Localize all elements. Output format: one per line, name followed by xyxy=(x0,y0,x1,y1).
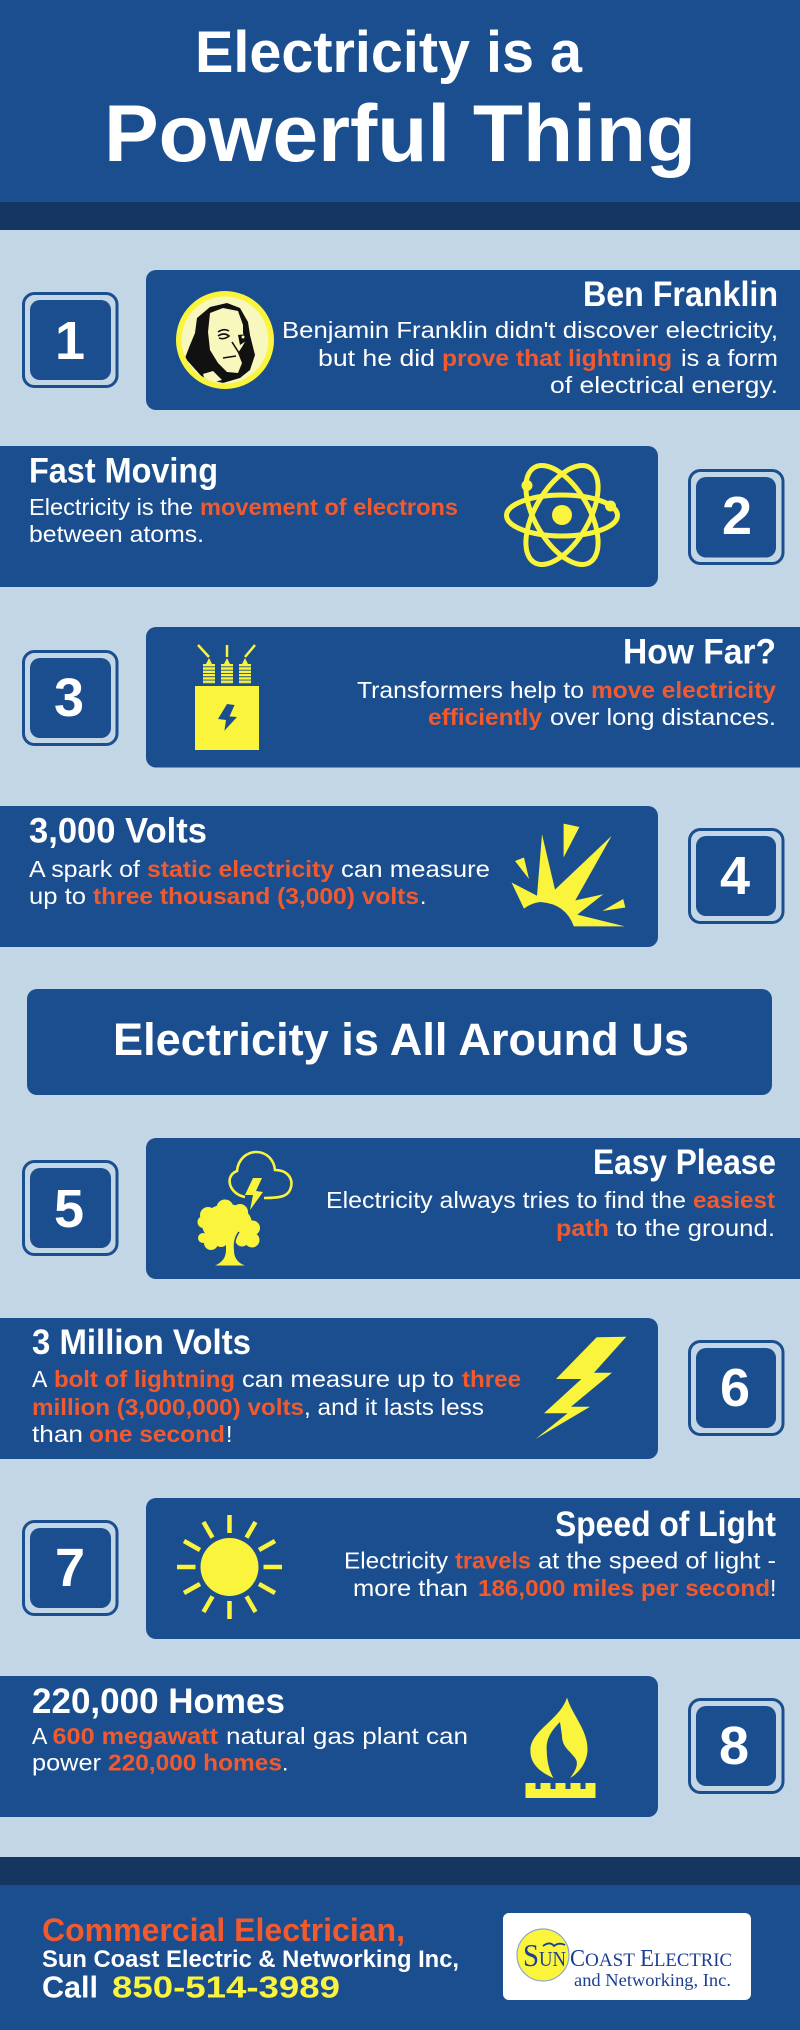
logo: Sun Coast Electric: OAST xyxy=(585,1950,635,1971)
body text xyxy=(282,317,778,398)
body text: 600 megawatt xyxy=(52,1723,218,1749)
header xyxy=(0,0,800,230)
number badge 4: 4 xyxy=(720,846,750,906)
panel: 5 Easy Please xyxy=(24,1138,800,1279)
heading: Fast Moving xyxy=(29,452,218,490)
icon: tree and storm cloud xyxy=(198,1152,291,1266)
logo: Sun Coast Electric: E xyxy=(640,1946,654,1972)
footer contact text: 850-514-3989 xyxy=(112,1970,340,2004)
body text: bolt of lightning xyxy=(54,1366,235,1392)
icon: lightning bolt xyxy=(536,1337,626,1439)
body text: three xyxy=(462,1366,521,1392)
footer contact text: Commercial Electrician, xyxy=(42,1912,405,1948)
logo: Sun Coast Electric: UN xyxy=(539,1947,566,1971)
panel: 6 3 Million Volts xyxy=(0,1318,783,1459)
logo: Sun Coast Electric: and Networking, Inc. xyxy=(574,1970,731,1990)
number badge 2 xyxy=(690,470,783,564)
body text: travels xyxy=(455,1548,531,1574)
body text: A xyxy=(32,1366,48,1392)
number badge 8 xyxy=(690,1700,783,1792)
body text xyxy=(344,1548,776,1601)
number badge 6 xyxy=(690,1342,783,1434)
icon: gas flame xyxy=(526,1698,596,1798)
body text: A xyxy=(32,1723,48,1749)
body text: ! xyxy=(770,1575,776,1601)
number badge 1 xyxy=(24,294,117,386)
body text: prove that lightning xyxy=(442,345,672,371)
body text: one second xyxy=(89,1421,225,1447)
body text xyxy=(29,856,490,909)
heading: 3 Million Volts xyxy=(32,1323,251,1362)
number badge 4 xyxy=(690,830,783,922)
body text: Electricity xyxy=(344,1548,449,1574)
body text: , and it lasts less xyxy=(304,1394,484,1420)
body text: up to xyxy=(29,883,86,909)
body text: . xyxy=(420,883,426,909)
body text: power xyxy=(32,1750,101,1776)
body text: Benjamin Franklin didn't discover electricity, xyxy=(282,317,778,343)
panel: 4 3,000 Volts xyxy=(0,806,783,947)
panel: 7 Speed of Light xyxy=(24,1498,800,1639)
icon: spark xyxy=(512,824,625,926)
number badge 5 xyxy=(24,1162,117,1254)
number badge 1: 1 xyxy=(55,311,85,371)
number badge 5: 5 xyxy=(54,1179,84,1239)
section banner: Electricity is All Around Us xyxy=(113,1014,689,1065)
logo: Sun Coast Electric: LECTRIC xyxy=(654,1950,732,1971)
body text: ! xyxy=(226,1421,232,1447)
body text: is a form xyxy=(681,345,778,371)
body text xyxy=(29,494,458,547)
body text: 186,000 miles per second xyxy=(478,1575,770,1601)
body text: Electricity is the xyxy=(29,494,193,520)
body text: move electricity xyxy=(591,677,776,703)
body text: path xyxy=(556,1215,609,1241)
body text: can measure xyxy=(341,856,490,882)
body text: more than xyxy=(353,1575,468,1601)
body text: at the speed of light - xyxy=(538,1548,776,1574)
icon: transformer xyxy=(195,645,259,750)
footer contact text: Call xyxy=(42,1970,98,2004)
body text: than xyxy=(32,1421,83,1447)
heading: 3,000 Volts xyxy=(29,812,207,850)
title: Electricity is a xyxy=(195,20,583,85)
logo: Sun Coast Electric xyxy=(503,1913,751,2000)
footer xyxy=(0,1857,800,2030)
body text: of electrical energy. xyxy=(550,372,778,398)
number badge 7 xyxy=(24,1522,117,1614)
heading: Speed of Light xyxy=(555,1505,776,1544)
panel: 8 220,000 Homes xyxy=(0,1676,783,1817)
body text: three thousand (3,000) volts xyxy=(93,883,419,909)
body text: natural gas plant can xyxy=(226,1723,468,1749)
heading: Ben Franklin xyxy=(583,275,778,314)
number badge 3 xyxy=(24,652,117,744)
title xyxy=(104,20,696,179)
body text: Transformers help to xyxy=(357,677,584,703)
body text: A spark of xyxy=(29,856,141,882)
number badge 2: 2 xyxy=(722,486,752,546)
number badge 3: 3 xyxy=(54,668,84,728)
body text: to the ground. xyxy=(616,1215,775,1241)
logo: Sun Coast Electric: C xyxy=(570,1946,585,1972)
body text: 220,000 homes xyxy=(108,1750,282,1776)
footer contact text: Sun Coast Electric & Networking Inc, xyxy=(42,1946,459,1973)
body text: Electricity always tries to find the xyxy=(326,1187,686,1213)
heading: 220,000 Homes xyxy=(32,1682,285,1721)
logo: Sun Coast Electric: S xyxy=(523,1937,539,1973)
body text: can measure up to xyxy=(242,1366,454,1392)
body text: between atoms. xyxy=(29,521,204,547)
body text: static electricity xyxy=(147,856,334,882)
title: Powerful Thing xyxy=(104,89,696,179)
icon: atom xyxy=(506,454,618,576)
body text: easiest xyxy=(693,1187,775,1213)
body text: million (3,000,000) volts xyxy=(32,1394,304,1420)
heading: Easy Please xyxy=(593,1143,776,1182)
icon: Ben Franklin portrait xyxy=(176,291,274,389)
icon: sun xyxy=(177,1515,282,1619)
body text: over long distances. xyxy=(550,704,776,730)
number badge 7: 7 xyxy=(55,1538,85,1598)
number badge 6: 6 xyxy=(720,1358,750,1418)
footer contact text xyxy=(42,1912,459,2004)
panel: 3 How Far xyxy=(24,627,800,768)
panel: 1 Ben Franklin xyxy=(24,270,800,410)
body text xyxy=(32,1723,468,1776)
body text: but he did xyxy=(318,345,435,371)
body text xyxy=(357,677,776,730)
body text xyxy=(326,1187,775,1241)
body text: movement of electrons xyxy=(200,494,458,520)
number badge 8: 8 xyxy=(719,1716,749,1776)
body text xyxy=(32,1366,521,1447)
heading: How Far? xyxy=(623,632,776,672)
body text: efficiently xyxy=(428,704,542,730)
panel: 2 Fast Moving xyxy=(0,446,783,587)
section banner xyxy=(27,989,772,1095)
body text: . xyxy=(282,1750,288,1776)
